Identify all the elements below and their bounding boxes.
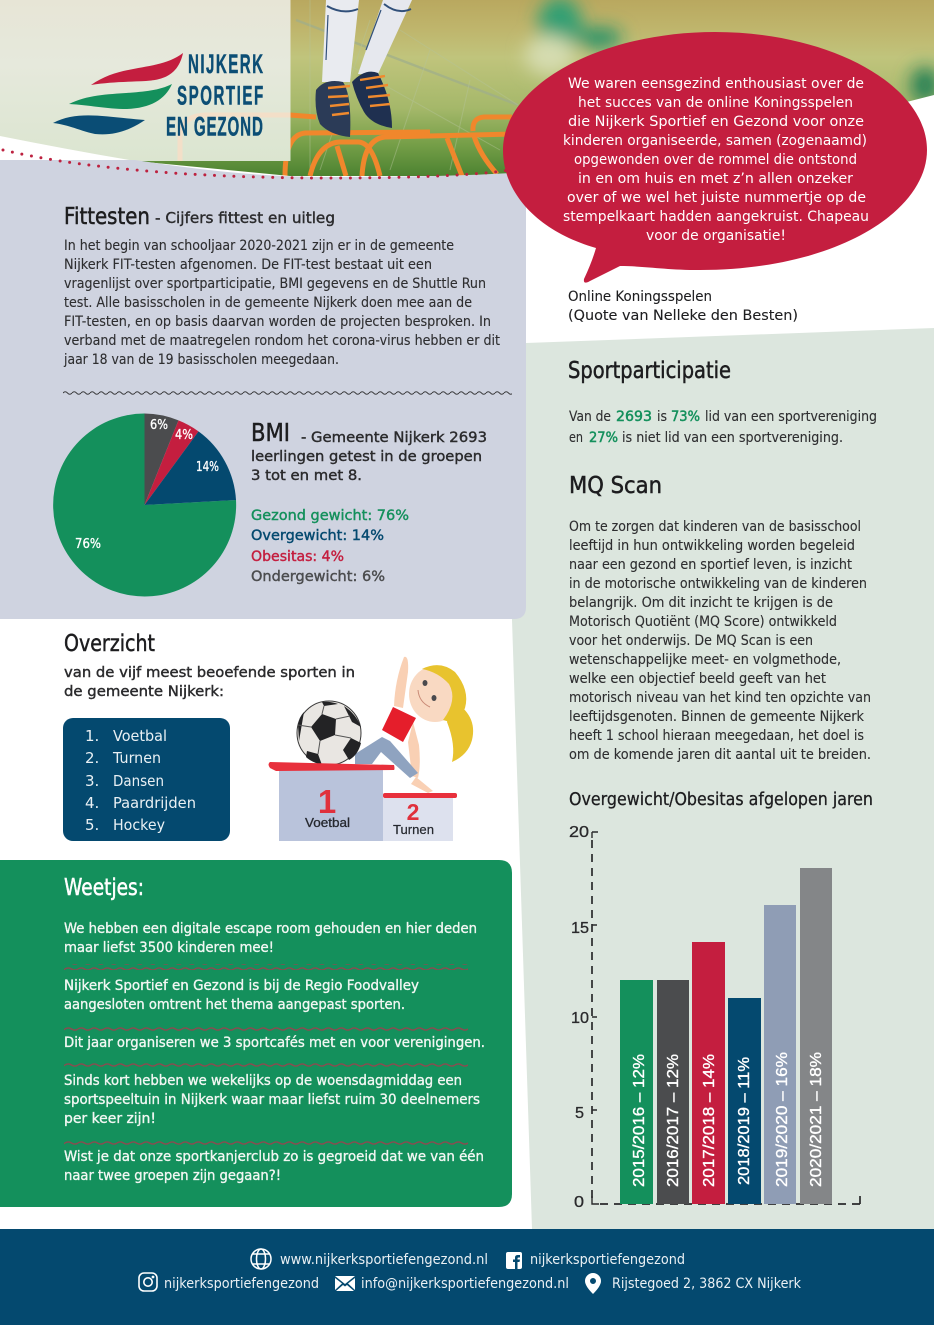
text: MQ scan: motorisch niveau van het kind ten opzichte van xyxy=(569,690,871,706)
heading: overzicht xyxy=(64,631,355,700)
axis labels: 10 xyxy=(571,1010,589,1027)
panel: weetjes: Weetjes: xyxy=(64,875,144,901)
quote text: We waren eensgezind enthousiast over de xyxy=(568,76,864,92)
text: sportparticipatie: lid van een sportvereniging xyxy=(705,409,877,425)
text: MQ scan: belangrijk. Om dit inzicht te krijgen is de xyxy=(569,595,833,611)
heading: overzicht: van de vijf meest beoefende sporten in xyxy=(64,665,355,681)
heading: MQ scan: MQ Scan xyxy=(569,473,662,499)
quote text xyxy=(563,76,869,244)
text: fittesten intro xyxy=(63,238,500,368)
text: fittesten intro: Nijkerk FIT-testen afgenomen. De FIT-test bestaat uit een xyxy=(64,257,432,273)
illustration: podium, ball and girl xyxy=(268,657,473,841)
text: MQ scan: leeftijdsgenoten. Binnen de gemeente Nijkerk xyxy=(569,709,865,725)
weetjes text: maar liefst 3500 kinderen mee! xyxy=(64,940,274,956)
podium second place: 2 xyxy=(407,799,419,825)
weetjes text: Nijkerk Sportief en Gezond is bij de Regio Foodvalley xyxy=(64,978,419,994)
quote attribution xyxy=(568,289,798,324)
text: fittesten intro: vragenlijst over sportparticipatie, BMI gegevens en de Shuttle Run xyxy=(64,276,486,292)
weetjes text: aangesloten omtrent het thema aangepast sporten. xyxy=(64,997,405,1013)
weetjes text: per keer zijn! xyxy=(64,1111,156,1127)
bar 2020/2021 xyxy=(800,868,832,1204)
bar chart: overgewicht en obesitas xyxy=(569,824,860,1211)
text: sportparticipatie: en xyxy=(569,430,583,446)
icon: envelope xyxy=(335,1276,355,1291)
pie chart: BMI: 76% xyxy=(75,537,101,552)
bar 2015/2016 xyxy=(620,980,653,1204)
heading: fittesten: - Cijfers fittest en uitleg xyxy=(155,209,335,227)
heading: fittesten xyxy=(64,204,335,230)
bar 2019/2020 xyxy=(764,905,796,1204)
logo: wordmark: SPORTIEF xyxy=(177,80,263,111)
podium first place: 1 xyxy=(318,783,336,820)
text: MQ scan: in de motorische ontwikkeling van de kinderen xyxy=(569,576,867,592)
weetjes text: Sinds kort hebben we wekelijks op de woensdagmiddag een xyxy=(64,1073,462,1089)
heading: overzicht: Overzicht xyxy=(64,631,155,657)
footer xyxy=(0,1229,934,1325)
podium second place: Turnen xyxy=(393,822,434,837)
bar 2017/2018: 2017/2018 – 14% xyxy=(701,1054,718,1187)
logo panel xyxy=(0,0,290,161)
header photo xyxy=(0,0,934,180)
white page curve below the photo xyxy=(0,95,934,345)
weetjes text: Dit jaar organiseren we 3 sportcafés met en voor verenigingen. xyxy=(64,1035,485,1051)
heading: sportparticipatie: Sportparticipatie xyxy=(568,358,731,384)
icon: globe xyxy=(251,1249,271,1269)
text: fittesten intro: FIT-testen, en op basis daarvan worden de projecten besproken. In xyxy=(64,314,491,330)
weetjes text: naar twee groepen zijn gegaan?! xyxy=(64,1168,281,1184)
icon: location pin xyxy=(585,1273,601,1294)
podium first place xyxy=(268,762,394,841)
axis labels: 0 xyxy=(574,1194,584,1211)
list: top five sports: Hockey xyxy=(113,816,165,834)
icon: facebook xyxy=(506,1252,522,1269)
list: top five sports xyxy=(63,718,230,841)
text: fittesten intro: verband met de maatregelen rondom het corona-virus hebben er dit xyxy=(64,333,500,349)
bar 2018/2019: 2018/2019 – 11% xyxy=(736,1057,753,1185)
axis labels: 20 xyxy=(569,824,589,841)
list: top five sports: Turnen xyxy=(112,749,161,767)
logo: wordmark xyxy=(166,48,263,142)
legs and shoes xyxy=(322,0,359,82)
pie chart: BMI: 6% xyxy=(150,418,168,433)
girl xyxy=(355,657,473,793)
weetjes text: Wist je dat onze sportkanjerclub zo is gegroeid dat we van één xyxy=(64,1149,484,1165)
quote text: in en om huis en met z’n allen onzeker xyxy=(578,171,853,187)
bar 2015/2016: 2015/2016 – 12% xyxy=(631,1054,648,1187)
legend: BMI: Ondergewicht: 6% xyxy=(251,569,385,585)
text: sportparticipatie: 73% xyxy=(671,409,700,425)
quote text: stempelkaart hadden aangekruist. Chapeau xyxy=(563,209,869,225)
weetjes text xyxy=(64,921,485,1184)
bar 2018/2019 xyxy=(728,998,761,1204)
bar 2017/2018 xyxy=(692,942,725,1204)
logo: wordmark: EN GEZOND xyxy=(166,111,263,142)
quote text: over of we wel het juiste nummertje op de xyxy=(567,190,866,206)
logo: wordmark: NIJKERK xyxy=(188,48,263,79)
list: top five sports: 2. xyxy=(85,749,99,767)
weetjes text: sportspeeltuin in Nijkerk waar maar liefst ruim 30 deelnemers xyxy=(64,1092,480,1108)
bar 2020/2021: 2020/2021 – 18% xyxy=(808,1052,825,1187)
text: MQ scan: om de komende jaren dit aantal uit te breiden. xyxy=(569,747,871,763)
text: sportparticipatie: Van de xyxy=(569,409,611,425)
icon: instagram xyxy=(139,1273,157,1291)
legend: BMI: Overgewicht: 14% xyxy=(251,528,384,544)
footer: info@nijkerksportiefengezond.nl xyxy=(361,1276,569,1292)
heading: fittesten: Fittesten xyxy=(64,204,150,230)
list: top five sports: 4. xyxy=(85,794,99,812)
footer: www.nijkerksportiefengezond.nl xyxy=(280,1252,488,1268)
text: MQ scan: Motorisch Quotiënt (MQ Score) ontwikkeld xyxy=(569,614,837,630)
heading: BMI: BMI xyxy=(251,418,290,447)
list: top five sports: Dansen xyxy=(113,772,164,790)
axis labels: 15 xyxy=(571,920,589,937)
bar 2016/2017 xyxy=(657,980,689,1204)
text: fittesten intro: jaar 18 van de 19 basisscholen meegedaan. xyxy=(63,352,339,368)
text: MQ scan: heeft 1 school hieraan meegedaan, het doel is xyxy=(569,728,864,744)
heading: BMI: - Gemeente Nijkerk 2693 xyxy=(301,430,487,446)
panel: sportparticipatie background xyxy=(512,328,934,1229)
quote speech bubble xyxy=(503,32,927,283)
heading: BMI: leerlingen getest in de groepen xyxy=(251,449,482,465)
bar 2016/2017: 2016/2017 – 12% xyxy=(665,1054,682,1187)
list: top five sports: Paardrijden xyxy=(113,794,196,812)
text: fittesten intro: In het begin van schooljaar 2020-2021 zijn er in de gemeente xyxy=(64,238,454,254)
quote text: het succes van de online Koningsspelen xyxy=(578,95,853,111)
text: MQ scan: welke een objectief beeld geeft van het xyxy=(569,671,826,687)
quote text: voor de organisatie! xyxy=(646,228,786,244)
text: MQ scan: wetenschappelijke meet- en volgmethode, xyxy=(569,652,841,668)
logo: wings xyxy=(53,53,183,134)
footer: nijkerksportiefengezond xyxy=(164,1276,319,1292)
quote text: kinderen organiseerde, samen (zogenaamd) xyxy=(563,133,867,149)
quote attribution: (Quote van Nelleke den Besten) xyxy=(568,308,798,324)
panel: weetjes xyxy=(0,860,512,1207)
text: MQ scan xyxy=(569,519,871,763)
heading: overzicht: de gemeente Nijkerk: xyxy=(64,684,224,700)
heading: bar chart: Overgewicht/Obesitas afgelopen jaren xyxy=(569,789,873,810)
list: top five sports: 3. xyxy=(85,772,99,790)
pie chart: BMI: 4% xyxy=(175,428,193,443)
legend: BMI: Obesitas: 4% xyxy=(251,549,344,565)
football xyxy=(297,701,361,765)
legend: BMI xyxy=(251,508,409,585)
text: MQ scan: naar een gezond en sportief leven, is inzicht xyxy=(569,557,852,573)
list: top five sports: 1. xyxy=(85,727,99,745)
text: sportparticipatie xyxy=(569,409,877,446)
text: sportparticipatie: is xyxy=(657,409,667,425)
legend: BMI: Gezond gewicht: 76% xyxy=(251,508,409,524)
list: top five sports: 5. xyxy=(85,816,99,834)
panel: fittesten background xyxy=(0,160,526,619)
decorative dots xyxy=(3,150,510,178)
weetjes text: We hebben een digitale escape room gehouden en hier deden xyxy=(64,921,477,937)
bar 2019/2020: 2019/2020 – 16% xyxy=(774,1052,791,1187)
podium first place: Voetbal xyxy=(305,815,350,830)
text: fittesten intro: test. Alle basisscholen in de gemeente Nijkerk doen mee aan de xyxy=(64,295,472,311)
quote text: opgewonden over de rommel die ontstond xyxy=(574,152,857,168)
hurdles xyxy=(285,115,512,176)
text: MQ scan: voor het onderwijs. De MQ Scan is een xyxy=(569,633,813,649)
chart axes xyxy=(592,840,860,1204)
text: sportparticipatie: 27% xyxy=(589,430,618,446)
axis labels xyxy=(569,824,589,1211)
axis labels: 5 xyxy=(575,1105,584,1122)
text: MQ scan: leeftijd in hun ontwikkeling worden begeleid xyxy=(569,538,855,554)
pie chart: BMI xyxy=(53,414,236,596)
heading: BMI: 3 tot en met 8. xyxy=(251,468,362,484)
quote attribution: Online Koningsspelen xyxy=(568,289,712,305)
text: sportparticipatie: 2693 xyxy=(616,409,652,425)
text: sportparticipatie: is niet lid van een sportvereniging. xyxy=(622,430,843,446)
heading: BMI xyxy=(251,418,487,484)
quote text: die Nijkerk Sportief en Gezond voor onze xyxy=(568,114,864,130)
text: MQ scan: Om te zorgen dat kinderen van de basisschool xyxy=(569,519,861,535)
footer: nijkerksportiefengezond xyxy=(530,1252,685,1268)
footer: Rijstegoed 2, 3862 CX Nijkerk xyxy=(612,1276,802,1292)
pie chart: BMI: 14% xyxy=(196,460,219,475)
list: top five sports: Voetbal xyxy=(113,727,167,745)
podium second place xyxy=(383,793,457,841)
